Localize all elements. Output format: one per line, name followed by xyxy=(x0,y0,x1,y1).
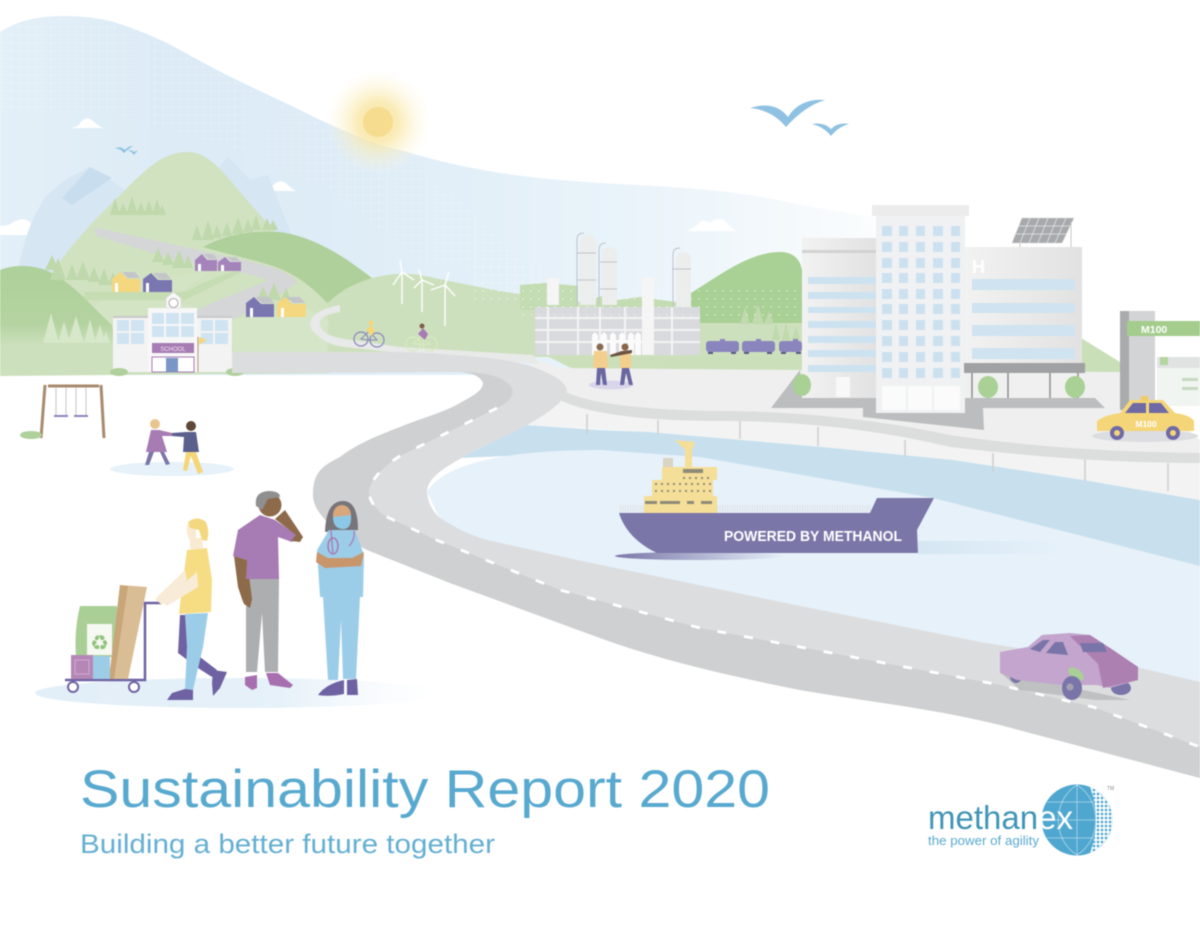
front leg xyxy=(185,613,208,690)
river dark band xyxy=(460,425,1200,570)
school windows xyxy=(117,313,228,344)
ground shadow under people xyxy=(35,678,445,708)
shoes xyxy=(318,679,358,696)
swing set xyxy=(20,385,104,439)
workers xyxy=(589,344,633,390)
building bases xyxy=(771,370,1105,430)
school door xyxy=(152,357,194,372)
scrub top xyxy=(317,530,364,597)
clouds xyxy=(0,119,737,235)
car shadow xyxy=(1000,672,1130,700)
cyclist one xyxy=(354,320,384,347)
road xyxy=(232,352,1200,778)
front shoe xyxy=(167,689,193,700)
river xyxy=(427,425,1200,690)
fuel station xyxy=(1120,311,1200,410)
rear shoe xyxy=(212,670,227,696)
cart of goods xyxy=(65,585,162,692)
houses xyxy=(112,254,306,317)
refinery towers xyxy=(580,235,691,320)
wall posts xyxy=(587,414,1168,491)
mountains xyxy=(10,157,300,305)
windows xyxy=(645,469,712,504)
big green hill xyxy=(55,152,330,360)
station pillar xyxy=(1120,311,1155,410)
cart frame xyxy=(65,603,162,680)
taxi xyxy=(1092,396,1198,442)
shoes xyxy=(245,673,293,690)
house: purple lower xyxy=(246,297,274,317)
recycling label xyxy=(87,624,112,655)
crossed arms xyxy=(316,552,364,568)
refinery picket fence xyxy=(592,332,641,355)
tank train xyxy=(706,339,802,354)
wall face xyxy=(527,400,1200,500)
promenade band xyxy=(560,392,1200,463)
logo globe xyxy=(1042,784,1112,856)
cart of goods: ♻ xyxy=(90,631,109,655)
mid hill terraces xyxy=(60,272,330,372)
house: violet right xyxy=(218,257,241,271)
sky dot pattern xyxy=(0,18,530,275)
scrub pants xyxy=(323,597,360,680)
hair xyxy=(188,518,208,541)
road centre dashes xyxy=(369,408,1200,747)
shrubs behind refinery xyxy=(520,283,676,310)
title: Sustainability Report 2020 xyxy=(80,760,770,819)
school sign xyxy=(152,343,194,353)
boards xyxy=(109,585,147,679)
man on phone xyxy=(233,491,303,690)
street trees xyxy=(793,374,1085,398)
sun xyxy=(326,70,430,174)
subtitle: Building a better future together xyxy=(80,829,495,859)
hill road xyxy=(93,227,297,335)
trees behind buildings xyxy=(740,304,800,340)
solar panel xyxy=(1012,218,1074,247)
refinery frame xyxy=(535,307,700,355)
sky xyxy=(0,16,880,375)
rear leg xyxy=(178,615,217,677)
head xyxy=(258,494,282,516)
refinery pipes xyxy=(577,233,691,318)
small right hill xyxy=(1081,338,1120,372)
neck and face xyxy=(187,520,203,549)
logo xyxy=(928,784,1114,856)
fuel station: M100 xyxy=(1141,324,1167,336)
ship shadow xyxy=(615,552,785,560)
refinery xyxy=(535,233,700,355)
hull xyxy=(619,498,934,553)
stethoscope xyxy=(331,530,354,553)
green hill behind buildings xyxy=(691,252,802,324)
worker left xyxy=(593,344,608,385)
school centre block xyxy=(148,308,197,372)
girl xyxy=(145,419,172,465)
bicycle path xyxy=(310,305,540,364)
ship xyxy=(615,440,934,560)
logo tagline: the power of agility xyxy=(928,833,1039,848)
hair xyxy=(325,501,358,532)
house: yellow lower xyxy=(277,297,306,317)
rear arm xyxy=(234,556,252,608)
car windows xyxy=(1030,640,1107,655)
school wings xyxy=(113,317,232,372)
green sack xyxy=(76,606,117,657)
taxi: M100 xyxy=(1135,419,1157,429)
dark green hill right xyxy=(203,232,372,303)
building: central tower xyxy=(872,205,969,413)
car dark side xyxy=(1070,635,1138,688)
logo wordmark: methanex xyxy=(928,799,1073,836)
leaf badge xyxy=(1066,665,1086,683)
trademark: TM xyxy=(1107,786,1114,792)
building: hospital xyxy=(964,247,1085,398)
arms xyxy=(155,570,198,606)
school: SCHOOL xyxy=(160,347,186,353)
river light water xyxy=(427,450,1200,690)
buildings xyxy=(793,205,1085,413)
clock tower xyxy=(166,292,181,308)
wind turbines xyxy=(393,260,455,326)
rear wheels xyxy=(1009,663,1023,683)
torso xyxy=(179,548,212,614)
cyclists xyxy=(354,320,437,351)
water streak xyxy=(918,541,1058,554)
face xyxy=(333,505,351,525)
hair xyxy=(256,491,280,510)
car body xyxy=(1000,633,1138,688)
railing xyxy=(620,505,872,513)
birds xyxy=(115,100,849,155)
worker right xyxy=(610,344,633,385)
ship name: POWERED BY METHANOL xyxy=(724,529,902,545)
building: hospital: H xyxy=(972,257,985,277)
station shop xyxy=(1157,368,1200,406)
refinery hill xyxy=(328,274,700,357)
refinery and hill dots xyxy=(470,260,802,322)
house: purple xyxy=(143,273,172,292)
children playing xyxy=(110,419,234,476)
cyclist two xyxy=(406,324,437,351)
house: violet left xyxy=(195,254,217,271)
school xyxy=(110,292,244,376)
bushes xyxy=(110,368,128,376)
embankment wall xyxy=(527,392,1200,500)
lower meadow xyxy=(0,340,330,376)
building: left tower xyxy=(802,238,876,398)
refinery white columns xyxy=(547,278,654,355)
boxes xyxy=(71,655,93,679)
nurse xyxy=(316,501,364,696)
trousers xyxy=(246,579,279,672)
M100 sign xyxy=(1127,321,1200,336)
mask xyxy=(333,515,351,529)
left dark green hill xyxy=(0,266,115,348)
grass strip xyxy=(547,356,802,370)
front wheel xyxy=(1062,676,1082,700)
boy xyxy=(172,421,203,474)
shirt xyxy=(233,515,297,579)
road surface xyxy=(232,352,1200,778)
plaza and cycle link xyxy=(520,354,1200,455)
superstructure xyxy=(644,440,717,513)
darker outer lane xyxy=(313,372,1200,778)
phone arm xyxy=(275,510,303,542)
flag xyxy=(197,337,199,372)
person pushing cart xyxy=(155,518,227,700)
pine trees xyxy=(43,196,291,343)
house: yellow xyxy=(112,272,140,292)
halftone edge xyxy=(1090,787,1112,853)
car xyxy=(1000,633,1138,700)
